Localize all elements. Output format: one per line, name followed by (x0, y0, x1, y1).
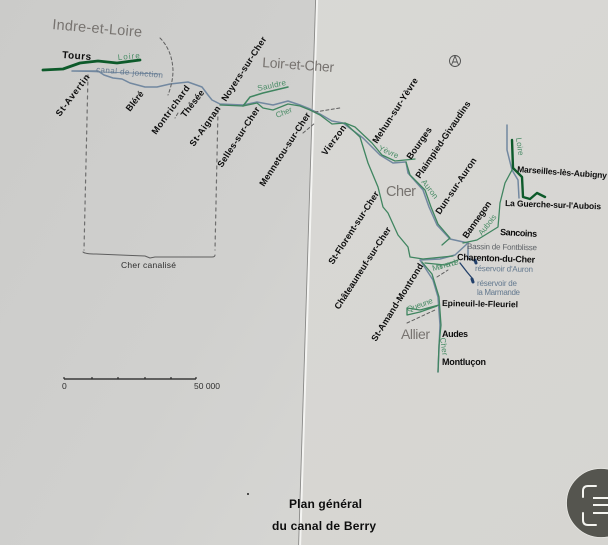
canal and reservoir labels (96, 65, 538, 297)
town labels horizontal: Audes (442, 329, 468, 339)
town labels horizontal: La Guerche-sur-l'Aubois (505, 198, 601, 211)
scan button icon (566, 468, 608, 538)
title: du canal de Berry (272, 519, 376, 533)
town labels horizontal: Epineuil-le-Fleuriel (442, 298, 518, 309)
town labels rotated: Bourges (404, 125, 434, 161)
canalised section bracket (83, 75, 218, 270)
river labels: Marmande (431, 257, 460, 273)
town labels horizontal: Sancoins (500, 227, 537, 239)
town labels rotated: Noyers-sur-Cher (219, 34, 269, 103)
town labels rotated: Châteauneuf-sur-Cher (332, 225, 393, 311)
town labels rotated: Bannegon (460, 199, 493, 240)
town labels rotated: St-Florent-sur-Cher (326, 189, 381, 266)
canal and reservoir labels: réservoir de (477, 279, 518, 288)
department labels: Cher (386, 184, 416, 200)
reservoirs (460, 260, 476, 282)
river labels: Sauldre (257, 78, 287, 93)
river: Loire east (512, 140, 545, 199)
town labels rotated: Montrichard (150, 83, 192, 136)
town labels rotated: Thésée (179, 88, 206, 119)
title: Plan général (289, 497, 362, 511)
river labels: Yèvre (377, 144, 401, 161)
page fold (299, 0, 317, 545)
department labels: Indre-et-Loire (52, 17, 143, 41)
compass mark (450, 56, 460, 66)
town labels horizontal: Montluçon (442, 357, 486, 367)
town labels rotated (54, 34, 493, 343)
department labels: Allier (401, 326, 430, 342)
label: Cher canalisé: Cher canalisé (121, 260, 176, 270)
canal blue lines (72, 71, 519, 372)
town labels rotated: Selles-sur-Cher (215, 105, 262, 169)
town labels rotated: Plaimpied-Givaudins (413, 99, 473, 180)
title (272, 497, 376, 533)
canal and reservoir labels: réservoir d'Auron (475, 264, 533, 274)
scale bar (62, 377, 220, 391)
town labels rotated: St-Amand-Montrond (369, 261, 425, 343)
town labels horizontal: Charenton-du-Cher (457, 252, 536, 265)
town labels horizontal: Tours (62, 50, 92, 63)
canal and reservoir labels: canal de jonction (96, 65, 163, 80)
river labels: Aubois (476, 213, 498, 237)
scale bar: 0 (62, 381, 67, 391)
department labels (52, 17, 430, 342)
department labels: Loir-et-Cher (262, 54, 335, 75)
river labels: Cher (274, 105, 294, 120)
small dot (247, 493, 249, 495)
river labels: Loire (117, 51, 141, 62)
town labels rotated: Dun-sur-Auron (433, 156, 479, 216)
town labels rotated: St-Aignan (187, 104, 223, 148)
town labels horizontal (62, 50, 608, 367)
department boundaries (160, 38, 448, 323)
canal and reservoir labels: la Marmande (477, 288, 521, 297)
town labels rotated: St-Avertin (54, 72, 92, 118)
river labels: Queune (406, 296, 435, 314)
town labels rotated: Mennetou-sur-Cher (257, 110, 313, 188)
river: Loire west (43, 60, 140, 70)
rivers green lines (220, 87, 512, 372)
river labels: Cher (438, 337, 449, 356)
scale bar: 50 000 (194, 381, 220, 391)
town labels rotated: Vierzon (320, 123, 348, 157)
town labels rotated: Bléré (124, 89, 146, 113)
river labels: Auron (419, 178, 440, 201)
river labels: Loire (514, 137, 526, 157)
canal and reservoir labels: Bassin de Fontblisse (467, 242, 538, 252)
town labels rotated: Mehun-sur-Yèvre (370, 76, 420, 145)
town labels horizontal: Marseilles-lès-Aubigny (517, 164, 608, 180)
river labels (117, 51, 526, 356)
